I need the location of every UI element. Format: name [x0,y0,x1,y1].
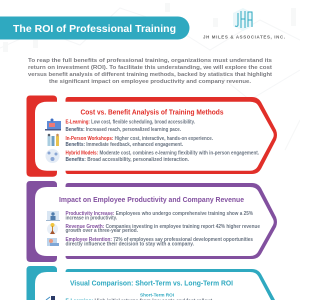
icon: productivity [46,211,60,221]
panel: cost vs benefit analysis: Benefits: Broad accessibility, personalized interaction. [66,157,189,163]
panel: cost vs benefit analysis [26,95,277,177]
logo wordmark: JH MILES & ASSOCIATES, INC. [203,34,285,40]
text: employee retention: Employee Retention: 72% of employees say professional development opportunities [66,237,253,243]
intro paragraph: return on investment (ROI). To facilitate this understanding, we will explore the cost [28,65,272,71]
icon: employee retention [47,238,59,246]
panel heading: Impact on Employee Productivity and Company Revenue [59,195,244,204]
title banner [0,16,189,40]
icon: e-learning [45,118,61,130]
panel: visual comparison [26,266,275,300]
panel heading: Cost vs. Benefit Analysis of Training Methods [80,107,224,116]
panel: impact on productivity and revenue: growth over a three-year period. [66,228,138,234]
panel frame: purple [26,181,277,262]
icon: short-term [46,296,55,300]
panel: impact on productivity and revenue: increase in productivity. [66,216,117,222]
intro paragraph: versus benefit analysis of different training methods, backed by statistics that highlight [28,72,272,78]
text: revenue growth: Revenue Growth: Companies investing in employee training report 42% higher revenue [66,224,260,230]
icon: revenue growth [47,223,58,234]
intro paragraph: To reap the full benefits of professional training, organizations must understand its [28,58,272,64]
panel frame: teal [26,266,275,300]
panel: impact on productivity and revenue: directly influence their decision to stay with a company. [66,242,194,248]
company logo [203,8,285,40]
text: e-learning: E-Learning: Low cost, flexible scheduling, broad accessibility. [66,120,195,126]
panel: cost vs benefit analysis: Benefits: Increased reach, personalized learning pace. [66,127,181,133]
panel heading: Visual Comparison: Short-Term vs. Long-Term ROI [70,279,233,288]
logo mark [233,8,253,31]
panel frame: red [26,95,277,177]
intro paragraph [28,58,272,85]
title banner: The ROI of Professional Training [13,24,176,35]
text: in-person workshops: In-Person Workshops: Higher cost, interactive, hands-on experience. [66,136,213,142]
icon: in-person workshops [48,134,59,146]
text: productivity: Productivity Increase: Employees who undergo comprehensive training show a 25% [66,211,253,217]
panel: impact on productivity and revenue [26,181,277,262]
icon: hybrid models [46,149,60,163]
intro paragraph: the significant impact on employee productivity and company revenue. [49,79,251,85]
panel: cost vs benefit analysis: Benefits: Immediate feedback, enhanced engagement. [66,142,183,148]
subheading: short-term ROI: Short-Term ROI [140,293,175,299]
text: hybrid models: Hybrid Models: Moderate cost, combines e-learning flexibility with in-person engagement. [66,150,259,156]
